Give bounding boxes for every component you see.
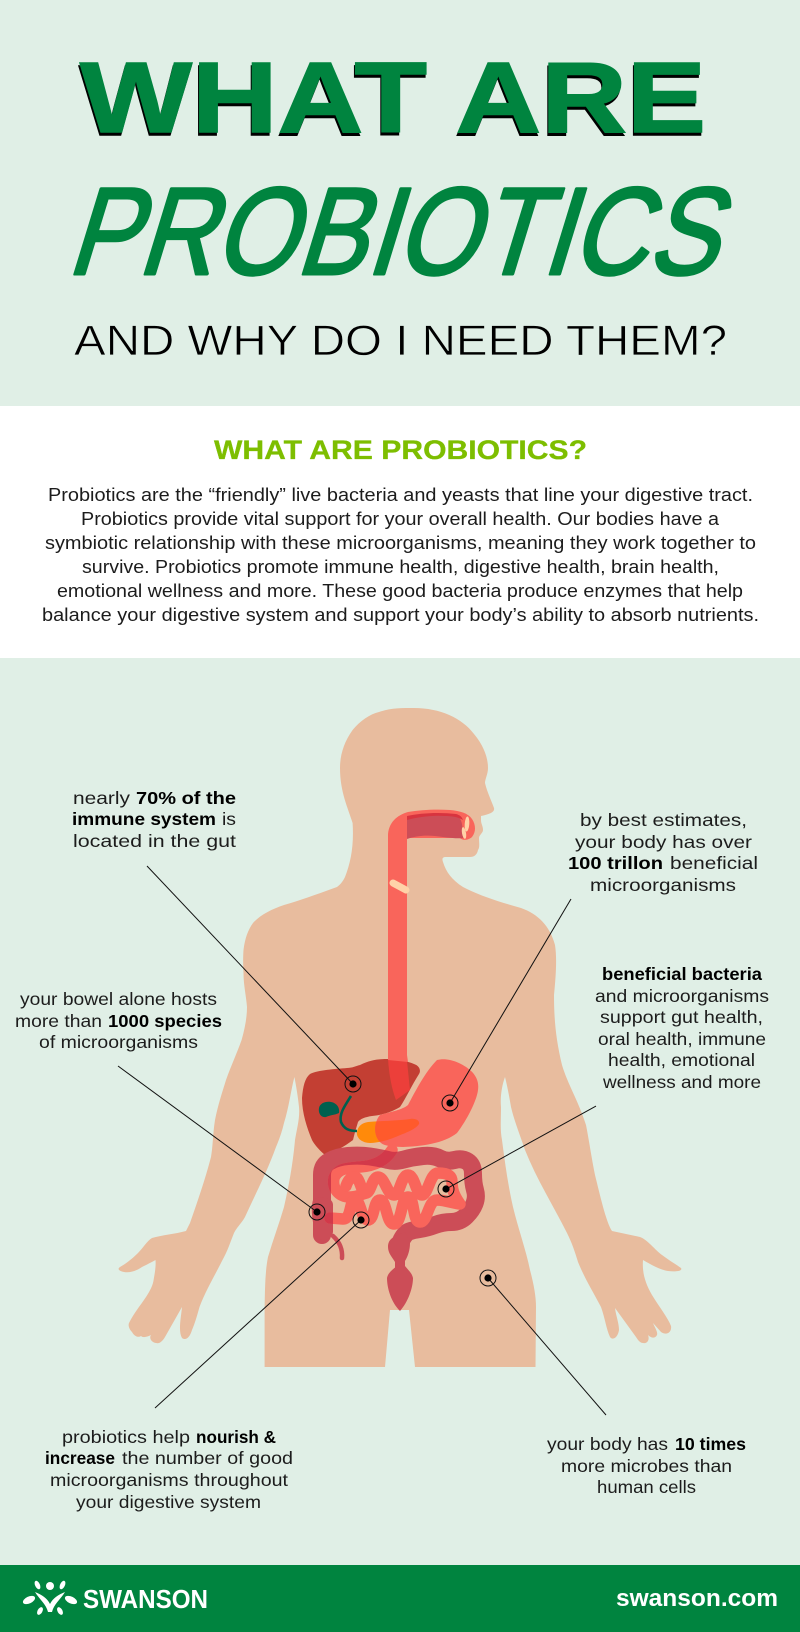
panel: what are probiotics intro [42, 435, 759, 625]
callout: nourish and increase: probiotics help [62, 1427, 190, 1447]
footer bar [0, 1565, 800, 1632]
callout: immune system [72, 788, 236, 851]
intro paragraph [42, 485, 759, 625]
intro heading: WHAT ARE PROBIOTICS? [214, 435, 587, 465]
callout: immune system: immune system [72, 809, 216, 829]
descending bulge [388, 1232, 410, 1268]
callout: 100 trillion microorganisms: by best estimates, [580, 810, 747, 830]
callout: bowel species: of microorganisms [39, 1032, 198, 1052]
stomach [375, 1059, 478, 1147]
ascending colon bulge [312, 1197, 333, 1240]
website: swanson.com [616, 1585, 778, 1612]
callout: beneficial bacteria: wellness and more [602, 1072, 761, 1092]
intro paragraph: symbiotic relationship with these microorganisms, meaning they work together to [45, 533, 756, 553]
pancreas [357, 1119, 419, 1143]
callout: 10 times more microbes: your body has [547, 1434, 668, 1454]
callout: 100 trillion microorganisms: microorganisms [590, 875, 736, 895]
intro paragraph: balance your digestive system and support your body’s ability to absorb nutrients. [42, 605, 759, 625]
esophagus tube [388, 810, 475, 1060]
callout leader lines [118, 866, 606, 1415]
intro paragraph: Probiotics provide vital support for your overall health. Our bodies have a [81, 509, 720, 529]
callout: immune system: is [222, 809, 236, 829]
intro paragraph: emotional wellness and more. These good bacteria produce enzymes that help [57, 581, 743, 601]
callout: 100 trillion microorganisms: your body has over [575, 832, 752, 852]
esophagus lower extension [388, 1055, 408, 1062]
appendix [333, 1236, 342, 1258]
title line: WHAT ARE: WHAT ARE [80, 42, 706, 154]
bile duct [341, 1096, 357, 1131]
callout: bowel species [15, 989, 222, 1052]
human body silhouette [119, 708, 681, 1367]
callout: nourish and increase: your digestive system [76, 1492, 261, 1512]
callout: bowel species: more than [15, 1011, 102, 1031]
callout: 100 trillion microorganisms [568, 810, 758, 895]
callout: immune system: 70% of the [136, 788, 236, 808]
callout: 10 times more microbes [547, 1434, 746, 1497]
palate shading [407, 813, 463, 820]
icon: teeth [464, 816, 470, 832]
callout: beneficial bacteria: beneficial bacteria [602, 964, 762, 984]
gallbladder [319, 1102, 339, 1117]
white intro band [0, 406, 800, 658]
callout: nourish and increase: nourish & [196, 1427, 276, 1447]
trachea flap [393, 883, 406, 890]
callout: bowel species: your bowel alone hosts [20, 989, 217, 1009]
brand name: SWANSON [83, 1584, 208, 1614]
callout: beneficial bacteria: oral health, immune [598, 1029, 766, 1049]
gallbladder and bile duct [319, 1096, 357, 1131]
rectum [387, 1266, 413, 1311]
callout target markers [309, 1076, 496, 1286]
large intestine [312, 1156, 476, 1311]
intro paragraph: Probiotics are the “friendly” live bacteria and yeasts that line your digestive tract. [48, 485, 753, 505]
intro paragraph: survive. Probiotics promote immune health, digestive health, brain health, [82, 557, 719, 577]
callout: beneficial bacteria: support gut health, [600, 1007, 763, 1027]
callout: immune system: located in the gut [73, 831, 236, 851]
callout: beneficial bacteria: health, emotional [608, 1050, 755, 1070]
callout: nourish and increase: the number of good [122, 1448, 293, 1468]
callout: immune system: nearly [73, 788, 130, 808]
callout: nourish and increase [45, 1427, 293, 1512]
callout: bowel species: 1000 species [108, 1011, 222, 1031]
esophagus over liver [388, 1059, 410, 1100]
callout: 10 times more microbes: more microbes than [561, 1456, 732, 1476]
callout: beneficial bacteria: and microorganisms [595, 986, 769, 1006]
liver [302, 1059, 420, 1155]
small intestine [330, 1150, 460, 1224]
callout: 10 times more microbes: 10 times [675, 1434, 746, 1454]
callout: nourish and increase: increase [45, 1448, 115, 1468]
callout: nourish and increase: microorganisms throughout [50, 1470, 288, 1490]
callout: 10 times more microbes: human cells [597, 1477, 696, 1497]
title [58, 42, 750, 365]
callout: 100 trillion microorganisms: 100 trillon [568, 853, 663, 873]
colon [322, 1156, 476, 1240]
callout: 100 trillion microorganisms: beneficial [670, 853, 758, 873]
small intestine and colon overlap [330, 1150, 392, 1219]
pancreas behind stomach [375, 1118, 420, 1142]
mouth and esophagus [388, 810, 475, 1060]
mouth cavity [407, 815, 463, 839]
icon: Swanson leaf figure logo [22, 1580, 78, 1616]
subtitle: AND WHY DO I NEED THEM? [74, 317, 727, 365]
callout: beneficial bacteria [595, 964, 769, 1092]
